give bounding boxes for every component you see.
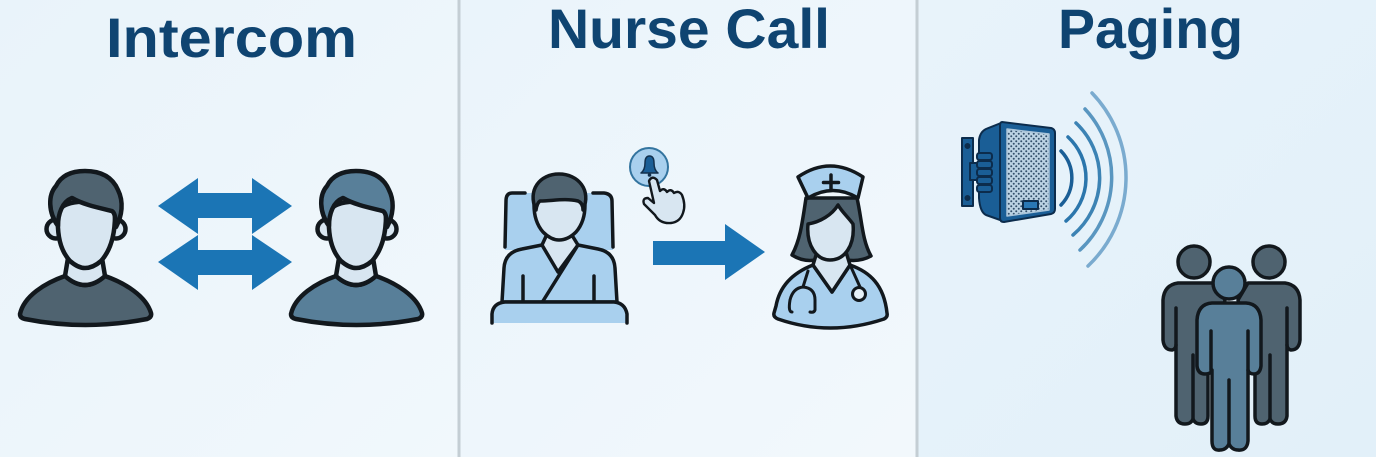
icon: left person xyxy=(20,171,151,325)
title: Intercom: Intercom xyxy=(106,6,357,69)
arrow: patient to nurse xyxy=(653,224,765,280)
icon: nurse xyxy=(774,166,887,328)
panel: intercom background xyxy=(0,0,459,457)
person: back right xyxy=(1238,246,1300,424)
icon: right person xyxy=(291,171,422,325)
icon: group of people xyxy=(1163,246,1300,450)
person: back left xyxy=(1163,246,1225,424)
icon: sound waves xyxy=(1061,93,1126,266)
icon: patient in bed xyxy=(492,174,627,323)
arrow: bottom two-way xyxy=(158,235,292,290)
icon: wall speaker xyxy=(962,122,1055,222)
panel: nurse call background xyxy=(459,0,917,457)
arrow: top two-way xyxy=(158,178,292,234)
person: front xyxy=(1197,267,1261,450)
icon: call bell button and hand xyxy=(630,148,684,223)
panel: paging background xyxy=(917,0,1376,457)
